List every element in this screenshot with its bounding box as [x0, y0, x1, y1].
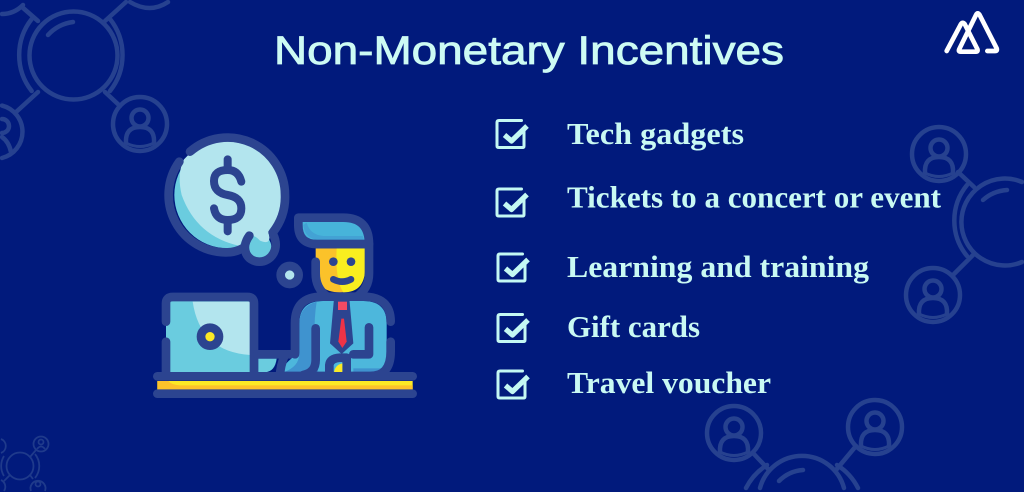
illustration: businessman at laptop [157, 138, 413, 394]
icon: thought dot [281, 266, 299, 284]
decoration: network bottom [707, 400, 902, 488]
icon: desk [157, 376, 413, 394]
item: Gift cards: Gift cards [567, 309, 700, 344]
item: Tech gadgets: Tech gadgets [567, 116, 744, 151]
decoration: network right [906, 127, 1022, 322]
title: Non-Monetary Incentives [274, 29, 784, 73]
item: Gift cards [498, 309, 700, 344]
checklist [497, 116, 942, 400]
item: Tech gadgets [497, 116, 744, 151]
item: Tickets to a concert or event: Tickets to a concert or event [567, 180, 942, 214]
icon: person [280, 218, 391, 376]
decoration: small network bottom left [1, 436, 48, 491]
item: Learning and training: Learning and training [567, 249, 870, 284]
item: Travel voucher: Travel voucher [567, 365, 771, 400]
icon: laptop [166, 297, 295, 376]
logo [947, 13, 997, 52]
icon: speech bubble with dollar [169, 138, 285, 262]
decoration: network top left [2, 2, 168, 158]
